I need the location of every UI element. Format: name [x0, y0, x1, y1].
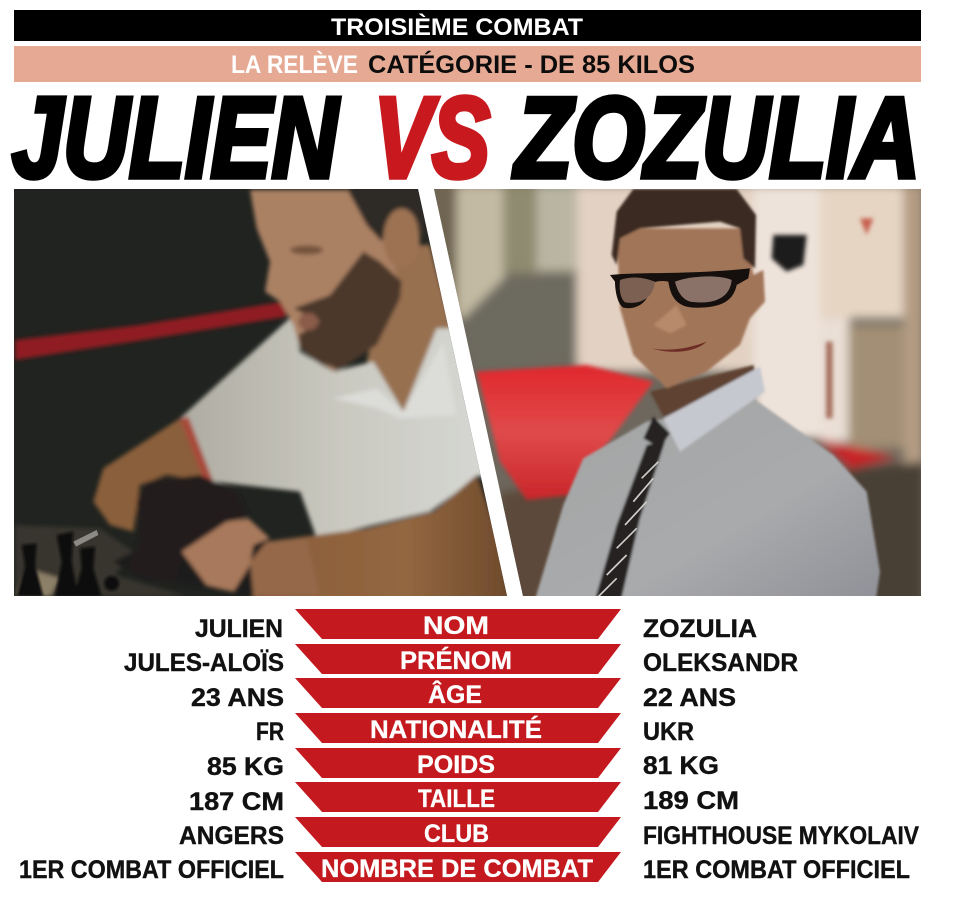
banner labels: CLUB: [424, 820, 489, 848]
top bar: troisième combat: [14, 10, 921, 41]
left fighter stats: 23 ANS: [191, 684, 284, 712]
photo: Julien at the chessboard: [14, 188, 527, 605]
right fighter stats: UKR: [643, 718, 694, 746]
red label banners: [295, 609, 621, 882]
title: Julien vs Zozulia: JULIEN: [12, 75, 340, 202]
banner labels: NOMBRE DE COMBAT: [321, 855, 593, 883]
banner labels: NATIONALITÉ: [370, 715, 542, 744]
right fighter stats: [643, 615, 919, 884]
title: Julien vs Zozulia: VS: [374, 75, 490, 202]
right fighter stats: 81 KG: [643, 752, 719, 780]
category bar: [14, 46, 921, 82]
banner labels: POIDS: [417, 751, 495, 779]
category bar: LA RELÈVE: [231, 50, 358, 79]
left fighter stats: JULIEN: [195, 615, 283, 643]
banner labels: PRÉNOM: [400, 646, 512, 675]
left fighter stats: [19, 615, 284, 884]
left fighter stats: JULES-ALOÏS: [124, 649, 284, 677]
left fighter stats: 85 KG: [207, 753, 284, 781]
photo: Zozulia in shirt and tie: [430, 185, 925, 605]
right fighter stats: 189 CM: [643, 787, 739, 815]
banner labels: NOM: [423, 612, 489, 640]
left fighter stats: 1ER COMBAT OFFICIEL: [19, 856, 284, 884]
right fighter stats: 1ER COMBAT OFFICIEL: [643, 856, 910, 884]
banner labels: TAILLE: [418, 785, 495, 813]
right fighter stats: FIGHTHOUSE MYKOLAIV: [643, 822, 919, 850]
banner labels: ÂGE: [428, 679, 482, 709]
banner labels: [321, 612, 593, 883]
right fighter stats: OLEKSANDR: [643, 649, 798, 677]
left fighter stats: ANGERS: [179, 822, 284, 850]
left fighter stats: 187 CM: [189, 788, 284, 816]
right fighter stats: 22 ANS: [643, 684, 736, 712]
left fighter stats: FR: [256, 718, 284, 746]
top bar: troisième combat: TROISIÈME COMBAT: [331, 13, 583, 41]
category bar: CATÉGORIE - DE 85 KILOS: [368, 50, 695, 79]
title: Julien vs Zozulia: [12, 75, 920, 202]
right fighter stats: ZOZULIA: [643, 615, 757, 643]
